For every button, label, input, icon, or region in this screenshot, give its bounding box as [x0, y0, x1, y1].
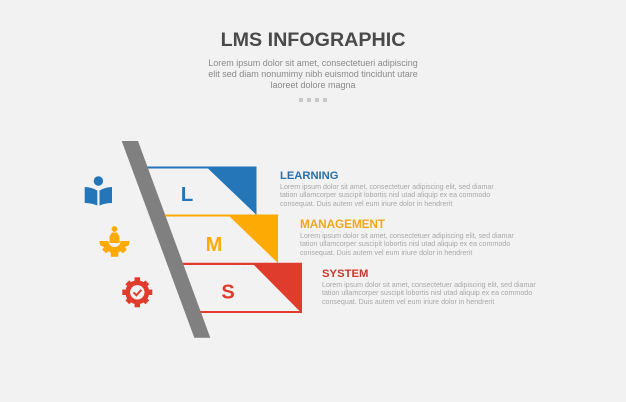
- icon: person on gear: [99, 226, 130, 257]
- slanted gray bar: [122, 141, 210, 338]
- panel: system tab: S: [221, 282, 235, 304]
- text: system: [322, 280, 536, 306]
- text: management: tation ullamcorper suscipit lobortis nisl utad aliquip ex ea commodo: [300, 240, 510, 248]
- text: learning: consequat. Duis autem vel eum iriure dolor in hendrerit: [280, 200, 452, 208]
- subtitle text: [208, 58, 418, 90]
- text: system: tation ullamcorper suscipit lobortis nisl utad aliquip ex ea commodo: [322, 289, 532, 297]
- panel: management tab: M: [206, 234, 222, 256]
- heading: system: SYSTEM: [322, 268, 368, 280]
- text: management: Lorem ipsum dolor sit amet, consectetuer adipiscing elit, sed diamar: [300, 232, 514, 240]
- icon: gear with check: [122, 277, 152, 307]
- subtitle text: Lorem ipsum dolor sit amet, consectetueri adipiscing: [208, 58, 418, 68]
- text: system: consequat. Duis autem vel eum iriure dolor in hendrerit: [322, 298, 494, 306]
- text: system: Lorem ipsum dolor sit amet, consectetuer adipiscing elit, sed diamar: [322, 280, 536, 288]
- heading: management: MANAGEMENT: [300, 218, 385, 231]
- icon: open book with reader: [85, 176, 112, 206]
- subtitle text: elit sed diam nonumimy nibh euismod tincidunt utare: [208, 69, 418, 79]
- text: management: [300, 232, 514, 256]
- title dots: [299, 98, 327, 102]
- text: learning: [280, 182, 494, 208]
- subtitle text: laoreet dolore magna: [270, 80, 356, 90]
- title: LMS INFOGRAPHIC: [221, 28, 405, 50]
- text: learning: tation ullamcorper suscipit lobortis nisl utad aliquip ex ea commodo: [280, 191, 490, 199]
- panel: management tab: [164, 214, 278, 263]
- panel: learning tab: [147, 166, 256, 215]
- text: learning: Lorem ipsum dolor sit amet, consectetuer adipiscing elit, sed diamar: [280, 182, 494, 190]
- text: management: consequat. Duis autem vel eum iriure dolor in hendrerit: [300, 248, 472, 256]
- panel: learning tab: L: [181, 183, 193, 206]
- heading: learning: LEARNING: [280, 170, 338, 182]
- panel: system tab: [182, 263, 302, 313]
